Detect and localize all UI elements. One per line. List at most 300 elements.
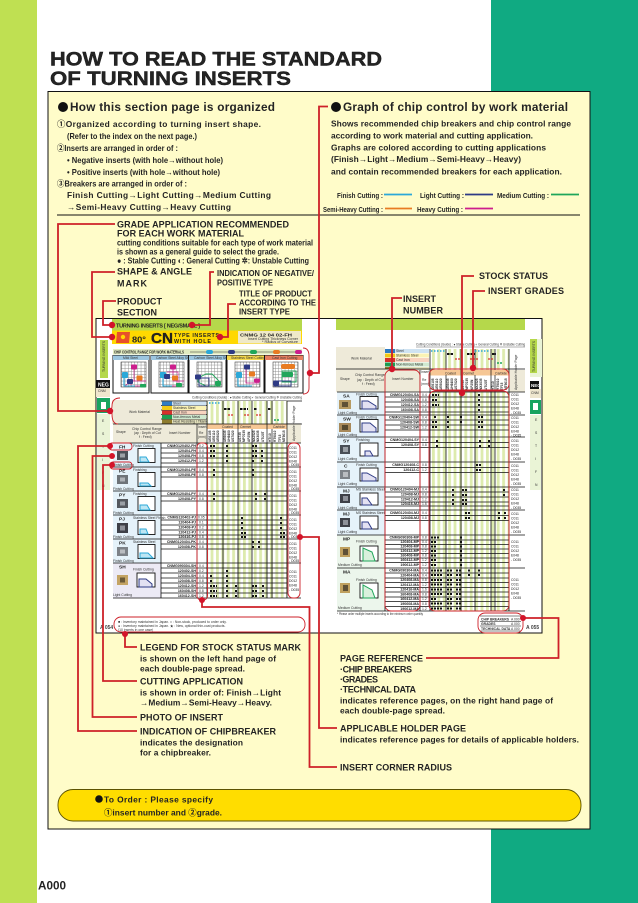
- section: SH: 160408-SH: [178, 589, 196, 593]
- page reference column: right: E048: [511, 406, 519, 410]
- callout outlines: [109, 348, 523, 633]
- label: cutting application: is shown in order of: Finish→Light: [140, 688, 281, 698]
- side tab: right: N: [535, 483, 538, 487]
- grade stripes: [430, 392, 509, 611]
- section: MJ: 0.4: [422, 488, 427, 492]
- legend: cutting lines: Finish Cutting :: [337, 191, 383, 200]
- section: MJ second: Light Cutting: [338, 530, 357, 534]
- section: MJ: 1.6: [422, 502, 427, 506]
- page reference column: C011: [289, 498, 297, 502]
- page reference table: A 000: [511, 618, 520, 622]
- work material table: right: Steel: [396, 349, 404, 353]
- page reference column: [289, 446, 299, 592]
- page reference column: right: [511, 393, 521, 600]
- label: indication of chipbreaker: [140, 726, 276, 758]
- section: SH: 0.8: [199, 579, 204, 583]
- page reference column: right: C011: [511, 544, 519, 548]
- label: grade application: is shown as a general guide to select the grade.: [117, 246, 279, 256]
- table header: Applicable Holder Page: [292, 405, 296, 441]
- section: MA: 190608-MA: [400, 602, 419, 606]
- side tab: right: TURNING INSERTS: [532, 340, 536, 372]
- icon: bullet: [58, 102, 68, 112]
- table header: (ap : Depth of Cut: [134, 431, 161, 435]
- work material table: Cast Iron: [173, 411, 187, 415]
- table header: Re: [199, 431, 203, 435]
- section: MJ second: 120408-MJ: [401, 516, 419, 520]
- section: PY: PY: [119, 492, 126, 498]
- label: insert number: INSERT: [403, 294, 436, 304]
- page reference column: right: - D035: [511, 596, 521, 600]
- product title bar: 80°: [132, 334, 147, 344]
- side tab: left: I: [102, 458, 103, 462]
- section: MP: 0.8: [422, 544, 427, 548]
- table header: right: UH6400: [450, 378, 454, 390]
- table header: right: MT9015: [504, 378, 508, 390]
- table header: right: US7020: [454, 378, 458, 390]
- table header: right: f : Feed): [362, 382, 375, 386]
- section: C: 0.8: [422, 463, 427, 467]
- section: PE: 120408-PE: [178, 473, 197, 477]
- section: MJ second: 0.4: [422, 511, 427, 515]
- label: insert number: NUMBER: [403, 306, 444, 316]
- section: SH: 0.4: [199, 574, 204, 578]
- arrow: indication of chipbreaker: [78, 446, 137, 731]
- graph: N: [227, 356, 265, 393]
- table header: right: Chip Control Range: [355, 373, 385, 377]
- section: PK: 120408-PK: [178, 545, 196, 549]
- table header: UE6110: [212, 430, 216, 442]
- section: FH: Finish Cutting: [133, 444, 154, 448]
- label: cutting application: [140, 676, 281, 708]
- section: PK: 0.8: [199, 545, 204, 549]
- section: PJ: [113, 515, 287, 539]
- section: MP: 190612-MP: [400, 563, 420, 567]
- stock legend note: ■ : Inventory maintained in Japan. □ : Non-stock, produced to order only.: [118, 620, 227, 624]
- section: SA: Light Cutting: [338, 411, 357, 415]
- table header: US7020: [231, 430, 235, 442]
- table header: f : Feed): [139, 435, 152, 439]
- section: PJ: 0.1: [199, 520, 204, 524]
- page reference column: E048: [289, 508, 297, 512]
- page reference column: right: - D035: [511, 482, 521, 486]
- table header: UTi20T: [261, 431, 265, 442]
- section: MP: 0.8: [422, 554, 427, 558]
- text block: ②Inserts are arranged in order of :: [57, 143, 178, 153]
- section: MA: 190612-MA: [400, 607, 419, 611]
- label: title of product: INSERT TYPE: [239, 306, 290, 316]
- table header: right: TF15: [500, 382, 504, 390]
- page reference column: right: C011: [511, 439, 519, 443]
- order pill: [58, 790, 581, 821]
- table header: Insert Number: [169, 431, 191, 435]
- work material table: right: [336, 342, 525, 370]
- page reference column: D012: [289, 551, 297, 555]
- page number: right: A 055: [526, 625, 539, 631]
- table header: right: Coated: [445, 372, 456, 376]
- section bar: product section: [112, 319, 302, 330]
- order text: To Order : Please specify: [104, 794, 213, 804]
- label: legend for stock status mark: LEGEND FOR STOCK STATUS MARK: [140, 642, 302, 652]
- product title bar: CNMG 12 04 02-FH: [240, 332, 292, 338]
- label: grade application: ● : Stable Cutting ◐: General Cutting ✲: Unstable Cutting: [117, 256, 309, 266]
- table header: MP7035: [242, 430, 246, 442]
- page reference column: D012: [289, 579, 297, 583]
- table header: right: RT9010: [496, 378, 500, 390]
- legend: cutting lines: Light Cutting :: [420, 191, 464, 200]
- table header: UE6020: [216, 430, 220, 442]
- graphs header: [113, 349, 302, 354]
- section: PK: Finish Cutting: [113, 559, 134, 563]
- label: grade application: FOR EACH WORK MATERIAL: [117, 228, 244, 238]
- page number: left: A 054: [100, 625, 113, 631]
- table rules: right: [337, 392, 525, 611]
- section: MJ second: MJ: [343, 512, 350, 518]
- page reference column: C011: [289, 474, 297, 478]
- page reference table: A 000: [511, 627, 520, 631]
- page reference table: CHIP BREAKERS: [481, 618, 510, 622]
- work material table: right: Cast Iron: [396, 358, 410, 362]
- table header: right: Carbide: [495, 372, 507, 376]
- annotation texts: bottom left: [140, 642, 302, 758]
- section: MJ: 120408-MJ: [401, 492, 419, 496]
- section: C: CNMG120408-C: [392, 463, 419, 467]
- page reference column: right: - D035: [511, 457, 521, 461]
- section: MA: 160412-MA: [400, 597, 419, 601]
- label: shape and angle mark: MARK: [117, 278, 148, 288]
- section: MP: 1.2: [422, 549, 427, 553]
- section: SH: 1.2: [199, 594, 204, 598]
- page reference column: right: C011: [511, 444, 519, 448]
- page reference column: right: E048: [511, 478, 519, 482]
- graph: M: Carbon Steel Alloy Steel: [156, 356, 193, 360]
- page reference table: TECHNICAL DATA: [481, 627, 511, 631]
- label: page reference: each double-page spread.: [340, 706, 445, 716]
- side tab: right: NEG: [531, 383, 541, 388]
- table header: UH6400: [227, 430, 231, 442]
- label: legend for stock status mark: is shown on the left hand page of: [140, 654, 276, 664]
- page reference column: D012: [289, 479, 297, 483]
- table header: right: MP7035: [465, 378, 469, 390]
- page reference column: right: D012: [511, 473, 519, 477]
- page reference column: right: C011: [511, 582, 519, 586]
- label: page reference: [340, 654, 553, 716]
- arrow: cutting application: [103, 465, 137, 681]
- arrow: grade application: [58, 224, 115, 411]
- table body: right: [337, 392, 525, 611]
- table header: right: NX3035: [479, 378, 483, 390]
- section: C: Finish Cutting: [356, 463, 377, 467]
- section: PE: Finishing: [133, 468, 147, 472]
- label: title of product: ACCORDING TO THE: [239, 298, 316, 308]
- left page: [96, 319, 303, 632]
- table header: Cermet: [240, 425, 251, 429]
- section: PY: 120408-PY: [178, 497, 197, 501]
- side tab: right: CNM: [531, 391, 539, 395]
- section: MP: 120404-MP: [400, 540, 420, 544]
- section: MA: 1.6: [422, 588, 427, 592]
- page reference column: E048: [289, 460, 297, 464]
- spread background: [96, 318, 542, 633]
- arrow: product section: [103, 301, 116, 325]
- page reference column: D012: [289, 527, 297, 531]
- section: SA: 120412-SA: [401, 403, 419, 407]
- label: negative or positive type: POSITIVE TYPE: [217, 278, 273, 288]
- section: PE: CNMG120404-PE: [167, 468, 197, 472]
- label: cutting application: CUTTING APPLICATION: [140, 676, 243, 686]
- section: PY: Finish Cutting: [113, 511, 134, 515]
- text block: ①Organized according to turning insert shape.: [57, 119, 261, 129]
- section: SW: 120408-SW: [400, 420, 420, 424]
- table header: right: UE6110: [435, 378, 439, 390]
- table header: UE6035: [223, 430, 227, 442]
- graph: K: Carbon Steel Alloy Steel: [194, 356, 231, 360]
- background: lime strip: [0, 0, 37, 903]
- section: MP: 1.2: [422, 558, 427, 562]
- page reference column: C011: [289, 522, 297, 526]
- section: SH: 160412-SH: [178, 594, 196, 598]
- page reference column: C011: [289, 542, 297, 546]
- page reference column: right: C011: [511, 488, 519, 492]
- section: SH: 0.2: [199, 569, 204, 573]
- section: PJ: CNMG120402-PJ: [167, 516, 196, 520]
- section: MJ: CNMG120404-MJ: [390, 488, 419, 492]
- section: MA: CNMG090304-MA: [389, 568, 419, 572]
- product title bar: CN: [151, 330, 173, 347]
- section: MA: 0.8: [422, 592, 427, 596]
- table header: Coated: [222, 425, 233, 429]
- section: PJ: 0.05: [198, 516, 205, 520]
- label: grade application: GRADE APPLICATION RECOMMENDED: [117, 220, 290, 230]
- work material table: Non-ferrous Metal: [173, 415, 200, 419]
- page reference column: right: C011: [511, 516, 519, 520]
- text block: Graphs are colored according to cutting applications: [331, 142, 546, 152]
- section: MA: 1.2: [422, 583, 427, 587]
- page reference column: right: - D035: [511, 558, 521, 562]
- text block: [331, 118, 571, 176]
- side tab: right: I: [535, 457, 536, 461]
- label: indication of chipbreaker: for a chipbreaker.: [140, 748, 211, 758]
- section: SH: CNMG090304-SH: [167, 564, 196, 568]
- table header: right: US735: [461, 380, 465, 390]
- page reference column: right: E048: [511, 430, 519, 434]
- table header: [113, 405, 301, 443]
- work material table: right: Stainless Steel: [396, 354, 419, 358]
- section: FH: 120412-FH: [178, 459, 196, 463]
- stock legend note: ● : Inventory maintained in Japan. ★ : New, optional thin-coat products.: [118, 624, 225, 628]
- background: green strip: [491, 0, 638, 903]
- icon: shape mark: [116, 332, 130, 343]
- section: MP: 160412-MP: [400, 558, 420, 562]
- section: MA: 1.2: [422, 607, 427, 611]
- table header: HTi10: [268, 433, 272, 442]
- section: SY: CNMG120404-SY: [390, 438, 420, 442]
- page reference column: E048: [289, 584, 297, 588]
- section: FH: 0.4: [199, 449, 204, 453]
- section: SW: 120412-SW: [400, 426, 420, 430]
- page reference table: [480, 616, 521, 631]
- heading: How this section page is organized: [70, 100, 275, 114]
- section: SH: 120408-SH: [178, 579, 196, 583]
- table header: Insert: [198, 425, 207, 429]
- section: MJ: 1.2: [422, 498, 427, 502]
- product title bar: TYPE INSERTS: [174, 333, 219, 339]
- work material table: right: Work Material: [351, 356, 372, 360]
- page reference column: E048: [289, 532, 297, 536]
- arrow: title of product: [220, 304, 236, 337]
- page reference table: GRADES: [481, 622, 496, 626]
- label: page reference: ·CHIP BREAKERS: [340, 664, 412, 674]
- section: PJ: 120412-PJ: [178, 530, 196, 534]
- arrow: stock status: [462, 276, 474, 393]
- section: SA: [337, 392, 509, 415]
- page reference column: right: C011: [511, 492, 519, 496]
- page reference column: right: E048: [511, 526, 519, 530]
- graph: P: Mild Steel: [123, 356, 138, 360]
- order text: ①insert number and ②grade.: [104, 808, 222, 818]
- arrow: graph of chip control: [310, 106, 328, 373]
- arrow: insert grades: [473, 291, 485, 368]
- right page: [336, 319, 542, 631]
- graph: M: [151, 356, 193, 393]
- table header: Chip Control Range: [132, 427, 162, 431]
- section: MJ second: [337, 510, 509, 535]
- page reference column: right: - D035: [511, 530, 521, 534]
- section: MP: CNMG090308-MP: [389, 536, 420, 540]
- section: C: Light Cutting: [338, 482, 357, 486]
- section: MP: [337, 535, 509, 568]
- section: SY: 0.4: [422, 438, 427, 442]
- page reference column: D012: [289, 503, 297, 507]
- graphs header: CHIP CONTROL RANGE FOR WORK MATERIALS: [114, 349, 184, 354]
- table body: [113, 443, 301, 598]
- section: SH: Light Cutting: [113, 593, 132, 597]
- graph: S: [265, 356, 303, 393]
- label: insert corner radius: INSERT CORNER RADIUS: [340, 762, 452, 772]
- page reference column: right: - D035: [511, 506, 521, 510]
- table header: right: Cermet: [463, 372, 474, 376]
- product title bar: [112, 330, 302, 347]
- section: PY: [113, 491, 287, 515]
- section: SA: 0.8: [422, 408, 427, 412]
- page reference column: right: D012: [511, 587, 519, 591]
- text block: →Semi-Heavy Cutting→Heavy Cutting: [67, 202, 231, 212]
- section: PY: 0.4: [199, 492, 204, 496]
- section: MA: MA: [343, 570, 351, 576]
- page reference column: right: D012: [511, 402, 519, 406]
- label: page reference: indicates reference pages, on the right hand page of: [340, 696, 553, 706]
- section: MP: 120412-MP: [400, 549, 420, 553]
- product title bar: * Radius of Curvature: [262, 340, 298, 344]
- title: HOW TO READ THE STANDARD: [50, 50, 382, 70]
- catalog spread: [96, 318, 542, 633]
- section: SY: 0.8: [422, 443, 427, 447]
- label: page reference: ·GRADES: [340, 674, 378, 684]
- section: MA: Finish Cutting: [356, 578, 377, 582]
- side tab: right: F: [535, 470, 537, 474]
- section: MJ: MS Stainless Steel: [356, 488, 385, 492]
- side tab: right: [530, 339, 542, 490]
- leader lines: [58, 106, 558, 767]
- section: MP: 0.4: [422, 540, 427, 544]
- section: SA: 0.8: [422, 398, 427, 402]
- table header: NX2525: [252, 430, 256, 442]
- panel background: [48, 92, 590, 829]
- table header: right: Applicable Holder Page: [514, 354, 518, 390]
- page reference column: right: C011: [511, 468, 519, 472]
- title: [50, 50, 382, 90]
- page reference column: C011: [289, 446, 297, 450]
- label: negative or positive type: [217, 268, 315, 288]
- side tab: right: E: [535, 418, 538, 422]
- page reference column: right: E048: [511, 554, 519, 558]
- page reference column: - D035: [289, 588, 299, 592]
- work material table: right: Non-ferrous Metal: [396, 363, 423, 367]
- label: title of product: TITLE OF PRODUCT: [239, 288, 313, 298]
- page reference column: E048: [289, 556, 297, 560]
- graph: N: Stainless Steel Cutting: [231, 356, 265, 360]
- section: PE: [113, 467, 287, 491]
- arrow: negative or positive type: [192, 272, 214, 325]
- section: SA: 120408-SA: [401, 398, 419, 402]
- section: PY: Finishing: [133, 492, 147, 496]
- table rules: [113, 443, 301, 598]
- section: SY: Finishing: [356, 438, 370, 442]
- section: SA: SA: [343, 394, 350, 400]
- table header: Carbide: [273, 425, 285, 429]
- section: SW: 0.4: [422, 416, 427, 420]
- label: insert number: [403, 294, 444, 316]
- section: MJ second: 0.8: [422, 516, 427, 520]
- section: MP: 160408-MP: [400, 554, 420, 558]
- section: MA: 0.8: [422, 578, 427, 582]
- label: legend for stock status mark: each double-page spread.: [140, 664, 245, 674]
- page reference column: right: - D035: [511, 411, 521, 415]
- label: applicable holder page: APPLICABLE HOLDER PAGE: [340, 724, 466, 734]
- page reference column: - D035: [289, 535, 299, 539]
- section: SH: Finish Cutting: [133, 568, 154, 572]
- arrow: legend for stock status: [125, 634, 137, 647]
- section: how this section page is organized: [57, 100, 275, 212]
- page reference column: E048: [289, 484, 297, 488]
- text block: according to work material and cutting application.: [331, 130, 533, 140]
- table header: Shape: [116, 430, 126, 434]
- section: SH: 0.4: [199, 564, 204, 568]
- graph: S: Cast Iron Cutting: [272, 356, 298, 360]
- label: indication of chipbreaker: INDICATION OF CHIPBREAKER: [140, 726, 276, 736]
- table header: right: Insert: [421, 370, 430, 374]
- page reference column: C011: [289, 546, 297, 550]
- section: PJ: 0.4: [199, 530, 204, 534]
- section: MP: 1.2: [422, 563, 427, 567]
- section: SW: 1.2: [422, 426, 427, 430]
- page reference column: - D035: [289, 487, 299, 491]
- section: SY: Light Cutting: [338, 457, 357, 461]
- section: MJ: [337, 487, 509, 510]
- page reference column: right: D012: [511, 425, 519, 429]
- section: C: 1.2: [422, 468, 427, 472]
- table header: right: HTi10: [491, 381, 495, 390]
- section: SW: Finish Cutting: [356, 416, 377, 420]
- page reference column: right: D012: [511, 497, 519, 501]
- section: MA: 0.4: [422, 573, 427, 577]
- side tab: left: TURNING INSERTS: [102, 340, 106, 372]
- cutting conditions legend: Cutting Conditions (Guide) : ● Stable Cutting ◐ General Cutting ✲ Unstable Cutting: [192, 396, 302, 400]
- section: MA: 120404-MA: [400, 573, 419, 577]
- section: SH: 0.8: [199, 589, 204, 593]
- section: PK: CNMG120404-PK: [167, 540, 196, 544]
- section: SH: SH: [119, 564, 126, 570]
- section: FH: Finish Cutting: [113, 463, 134, 467]
